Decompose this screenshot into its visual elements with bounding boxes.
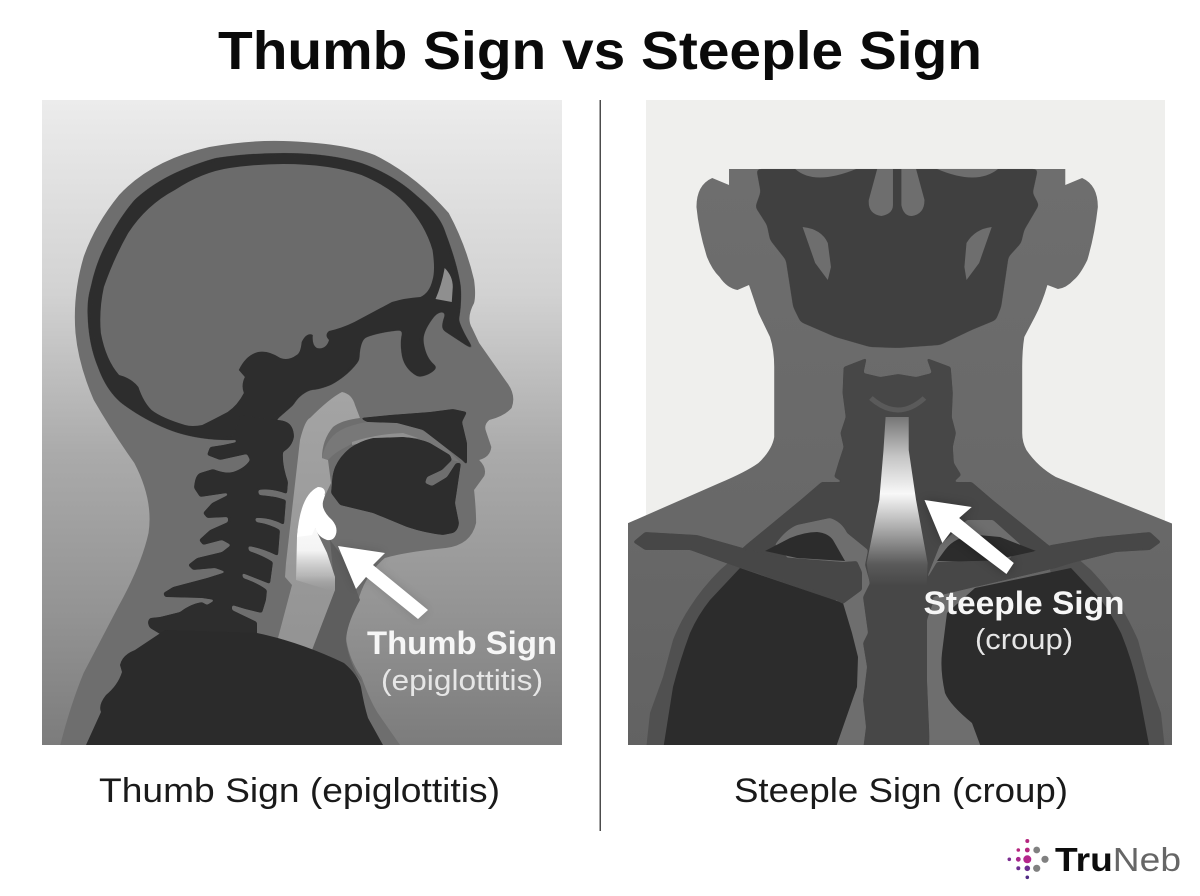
left upper lung [765, 532, 845, 561]
face bones [755, 169, 1039, 348]
caption: thumb sign: Thumb Sign (epiglottitis) [99, 772, 500, 810]
darker neck soft tissue [312, 540, 362, 682]
title: Thumb Sign vs Steeple Sign [218, 21, 982, 81]
right upper lung [937, 535, 1036, 562]
callout: thumb sign label: (epiglottitis) [381, 665, 543, 697]
left lung [663, 568, 858, 750]
upper jaw [360, 409, 467, 465]
orbit bottoms and nasal cavity [795, 169, 998, 280]
airway [278, 392, 360, 650]
caption: steeple sign: Steeple Sign (croup) [734, 772, 1068, 810]
head neck and bones [628, 168, 1172, 745]
panel background [42, 100, 562, 745]
cricoid arc [871, 398, 924, 410]
divider [600, 100, 601, 831]
callout: steeple sign label: (croup) [975, 624, 1073, 656]
right apical and medial band [927, 520, 1021, 750]
neck column and mediastinum [743, 359, 1049, 745]
anatomy: lateral skull [60, 141, 513, 745]
head neck and shoulders [628, 169, 1172, 745]
left orbit [795, 169, 856, 178]
panel: steeple sign frontal neck illustration [628, 100, 1172, 745]
right orbit [937, 169, 998, 178]
right lung rim [1050, 550, 1165, 750]
epiglottis glow [296, 487, 335, 592]
frontal sinus [436, 268, 453, 302]
right clavicle [928, 532, 1161, 597]
mouth cavity [331, 437, 461, 535]
panel: thumb sign lateral neck illustration [42, 100, 562, 745]
arrow: thumb sign [338, 546, 428, 619]
soft palate arc [322, 421, 460, 462]
head outline [60, 141, 513, 745]
callout: thumb sign label: Thumb Sign [367, 625, 557, 661]
cervical spine [148, 415, 294, 640]
panel background [646, 100, 1165, 540]
left clavicle [633, 532, 862, 604]
thumb-shaped epiglottis [297, 487, 336, 540]
brain cavity [100, 164, 434, 426]
steeple-shaped trachea [867, 417, 1014, 585]
logo dots [1008, 839, 1049, 879]
anatomy: frontal head and chest [628, 168, 1172, 745]
right mandibular gap [964, 227, 992, 280]
left apical and medial band [775, 518, 870, 750]
right lung [941, 568, 1150, 750]
palate highlight [352, 433, 418, 445]
left lung rim [646, 564, 758, 745]
logo wordmark: TruNeb [1055, 841, 1181, 878]
logo: TruNeb [1008, 839, 1181, 879]
callout: thumb sign label [367, 625, 557, 697]
skull [87, 153, 476, 440]
callout: steeple sign label [924, 585, 1124, 656]
right nasal cavity [901, 169, 924, 216]
arrow: steeple sign [924, 500, 1014, 574]
upper chest silhouette [86, 630, 383, 745]
callout: steeple sign label: Steeple Sign [924, 585, 1124, 621]
left mandibular gap [803, 227, 831, 280]
left nasal cavity [869, 169, 893, 216]
